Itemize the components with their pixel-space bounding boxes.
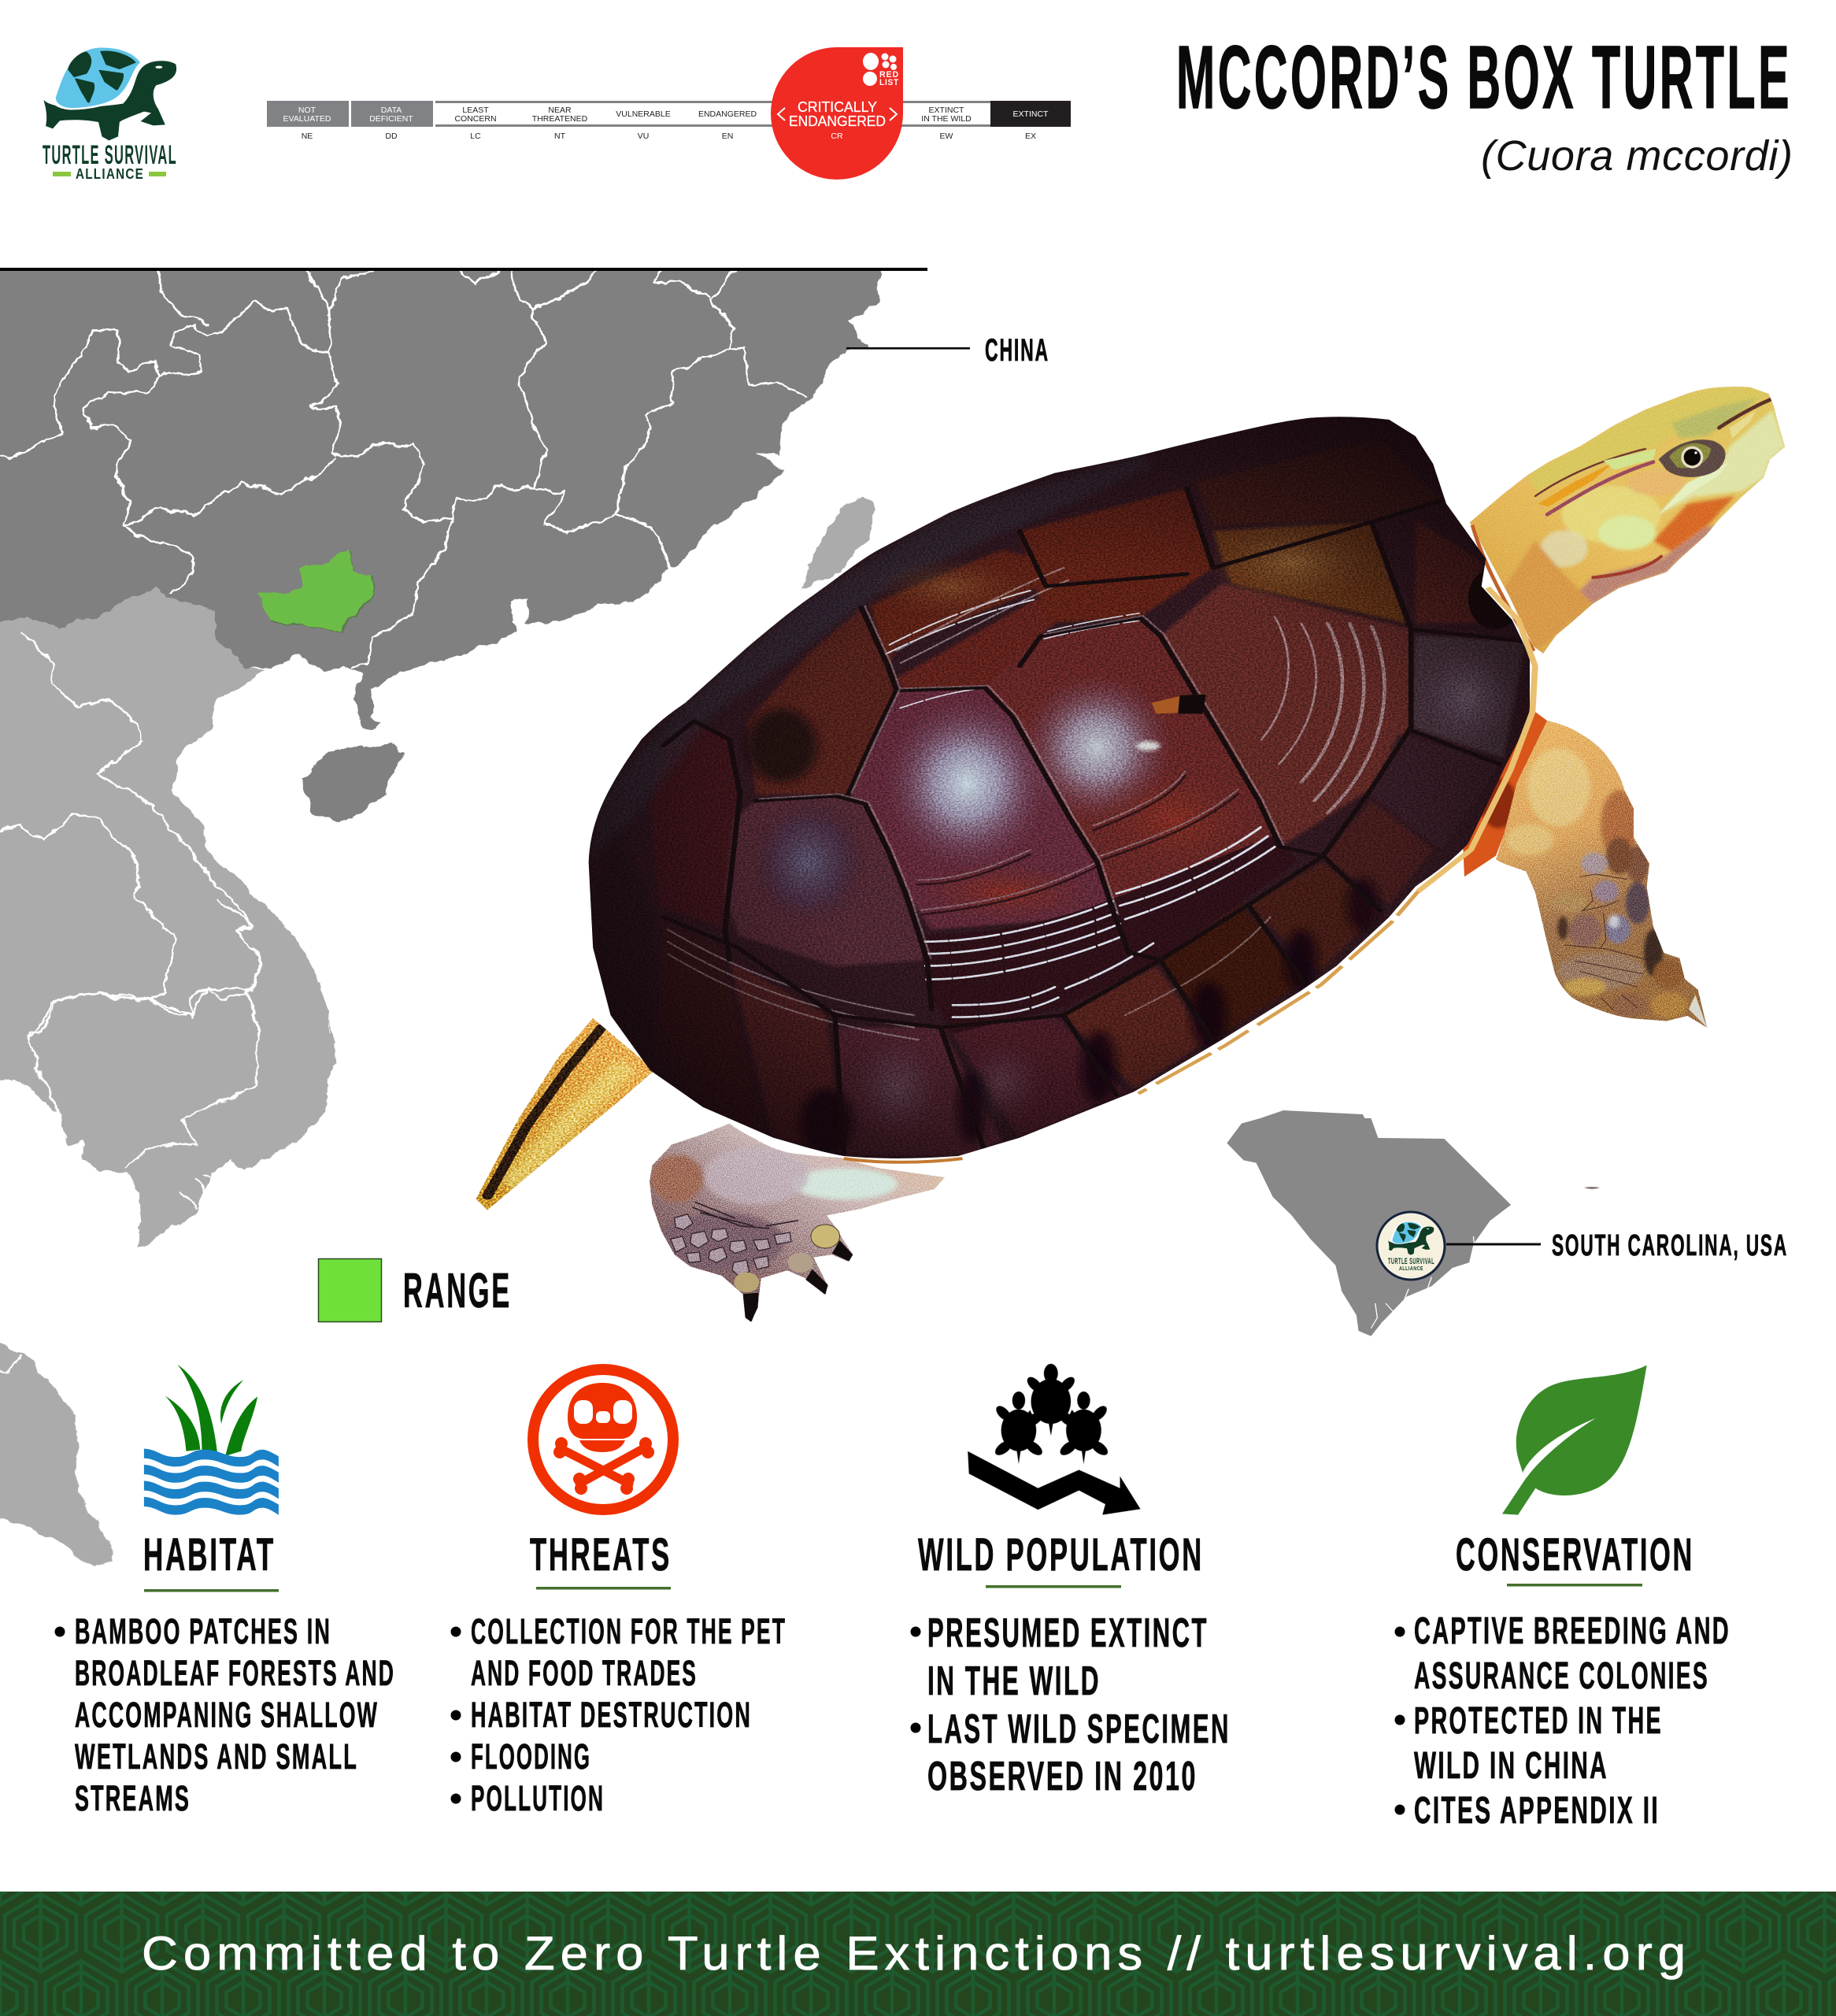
wild population underline (986, 1585, 1121, 1588)
badge: tsa location: ALLIANCE (1399, 1266, 1423, 1272)
callout: china label: CHINA (985, 333, 1049, 368)
badge: tsa location (1377, 1212, 1445, 1280)
callout: south carolina label (1446, 1229, 1788, 1262)
wild population text: OBSERVED IN 2010 (927, 1754, 1197, 1799)
scale labels: DEFICIENT (369, 114, 413, 124)
wild population text: LAST WILD SPECIMEN (927, 1707, 1231, 1752)
habitat heading: HABITAT (143, 1529, 276, 1581)
footer tagline: Committed to Zero Turtle Extinctions // turtlesurvival.org (142, 1927, 1691, 1980)
wild population text (910, 1610, 1231, 1799)
scale labels: NE (302, 132, 313, 141)
footer banner (0, 1892, 1836, 2016)
threats text: AND FOOD TRADES (471, 1653, 698, 1693)
threats heading: THREATS (530, 1529, 672, 1581)
range area on map (258, 548, 372, 632)
icon: globe turtle (43, 46, 176, 140)
map: mainland southeast asia (0, 1018, 337, 1250)
map: hainan island (304, 742, 404, 822)
scale labels: VU (638, 132, 649, 141)
panel: habitat (55, 1365, 395, 1818)
habitat underline (144, 1589, 279, 1592)
map: malay peninsula (0, 1325, 113, 1566)
threats text: POLLUTION (471, 1778, 605, 1818)
icon: leaf (1502, 1365, 1647, 1515)
legend: range: RANGE (403, 1264, 512, 1318)
habitat text: BAMBOO PATCHES IN (75, 1611, 331, 1651)
data deficient box (351, 101, 433, 127)
panel: wild population (910, 1364, 1231, 1799)
conservation text (1395, 1610, 1731, 1832)
neck and head (1457, 378, 1797, 667)
Red List status scale (267, 47, 1071, 180)
extinct box (990, 101, 1071, 127)
scale labels: NT (554, 132, 566, 141)
photo smudge (1584, 1187, 1600, 1189)
habitat text (55, 1611, 395, 1818)
scale labels: DD (385, 132, 398, 141)
red list mark (863, 53, 899, 87)
wild population heading: WILD POPULATION (918, 1529, 1204, 1581)
habitat text: BROADLEAF FORESTS AND (75, 1653, 395, 1693)
threats text: COLLECTION FOR THE PET (471, 1611, 787, 1651)
badge: tsa location: TURTLE SURVIVAL (1388, 1257, 1434, 1266)
front leg scales (1551, 837, 1687, 1018)
scale labels: EW (940, 132, 953, 141)
shell scutes (593, 439, 1526, 1156)
logo: Turtle Survival Alliance (43, 46, 177, 182)
shell edge shading (545, 402, 1557, 1174)
scale labels: NEAR (548, 106, 572, 115)
hind foot scales (671, 1214, 791, 1276)
scale labels: CONCERN (454, 114, 497, 124)
scale labels: DATA (381, 106, 402, 115)
map: taiwan (805, 498, 877, 588)
panel: conservation (1395, 1365, 1731, 1832)
scale labels: LC (470, 132, 481, 141)
map: indochina borders (0, 901, 261, 1373)
wild population text: IN THE WILD (927, 1658, 1101, 1704)
legend: range (318, 1258, 512, 1321)
map: Southeast Asia range map (0, 257, 883, 1566)
icon: declining arrow (968, 1451, 1141, 1515)
threats text (450, 1611, 787, 1818)
scientific name: (Cuora mccordi) (1481, 132, 1793, 180)
threat scale frame (435, 102, 990, 126)
shell speckle (545, 402, 1557, 1174)
shell highlights and rings (749, 591, 1297, 1034)
icon: declining turtle population (968, 1364, 1141, 1515)
red list mark: RED (879, 70, 899, 80)
toes and claws (734, 1225, 853, 1322)
critically endangered badge (771, 47, 903, 180)
logo green bars (53, 172, 166, 176)
map top rule (0, 268, 927, 271)
habitat text: WETLANDS AND SMALL (75, 1736, 358, 1777)
threats underline (536, 1587, 671, 1589)
scale labels: EX (1025, 132, 1036, 141)
panel: threats (450, 1369, 787, 1818)
logo subtitle: ALLIANCE (76, 166, 144, 182)
map: china mainland (0, 257, 883, 729)
conservation underline (1507, 1584, 1642, 1586)
icon: skull and crossbones (533, 1369, 673, 1510)
conservation text: PROTECTED IN THE (1414, 1700, 1663, 1742)
scale labels: CR (831, 132, 843, 141)
conservation text: WILD IN CHINA (1414, 1745, 1608, 1787)
critically endangered label: CRITICALLY (798, 99, 877, 115)
scale labels: EN (722, 132, 733, 141)
critically endangered label (778, 99, 897, 129)
front leg (1463, 710, 1707, 1028)
scratch mark (1152, 694, 1206, 713)
scale labels: THREATENED (532, 114, 588, 124)
scale labels: NOT (298, 106, 316, 115)
critically endangered label: ENDANGERED (789, 113, 886, 129)
range shadow (260, 550, 374, 633)
map: south carolina (1227, 1110, 1788, 1336)
head colour blending (1504, 387, 1785, 651)
threats text: FLOODING (471, 1736, 591, 1777)
scale labels: EVALUATED (283, 114, 331, 124)
icon: grass and water (144, 1365, 279, 1515)
scale labels (283, 106, 1049, 141)
shell (545, 402, 1557, 1174)
tail (476, 1018, 653, 1210)
not evaluated box (267, 101, 349, 127)
scale labels: EXTINCT (929, 106, 964, 115)
map: province borders (0, 262, 808, 1040)
text: TURTLE SURVIVAL (43, 140, 177, 170)
threats text: HABITAT DESTRUCTION (471, 1695, 752, 1735)
hind leg (630, 1113, 958, 1329)
conservation text: CITES APPENDIX II (1414, 1790, 1660, 1832)
scale labels: EXTINCT (1013, 109, 1049, 119)
map: upper light landmass (0, 587, 330, 1046)
red list mark: LIST (879, 78, 899, 87)
growth rings on side scutes (668, 568, 1385, 1040)
shell seams (664, 488, 1526, 1153)
wild population text: PRESUMED EXTINCT (927, 1610, 1209, 1656)
turtle photograph illustration (457, 378, 1797, 1329)
scale labels: VULNERABLE (616, 109, 671, 119)
scale labels: IN THE WILD (921, 114, 972, 124)
yellow shell rim (1418, 587, 1535, 891)
scale labels: LEAST (462, 106, 489, 115)
scale labels: ENDANGERED (698, 109, 757, 119)
habitat text: ACCOMPANING SHALLOW (75, 1695, 379, 1735)
habitat text: STREAMS (75, 1778, 191, 1818)
